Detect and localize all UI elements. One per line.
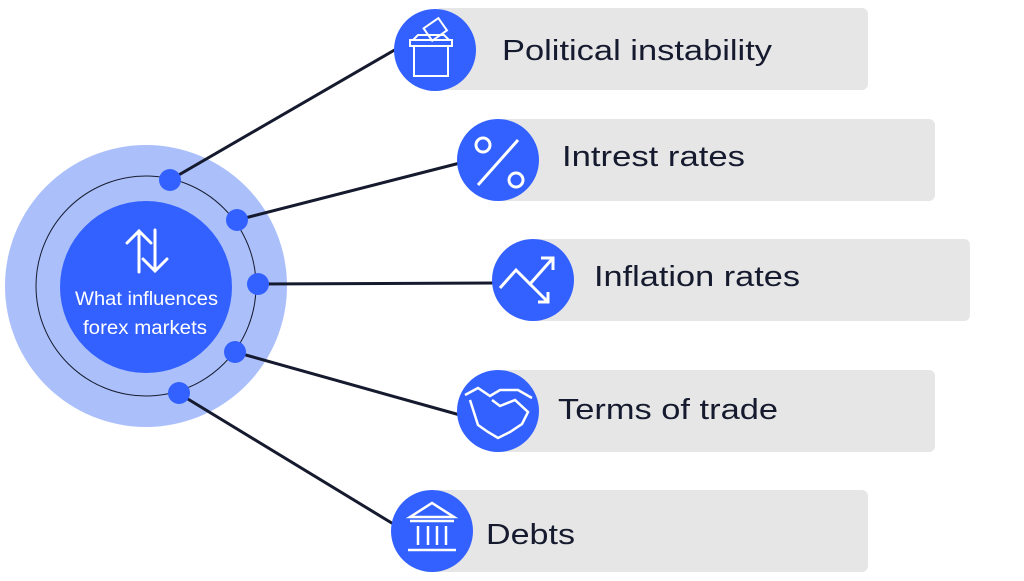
- item: political instability: Political instability: [502, 35, 773, 67]
- icon: up/down arrows: [127, 230, 167, 272]
- item: inflation rates: Inflation rates: [594, 261, 800, 293]
- item: interest rates: [457, 119, 935, 201]
- item: interest rates: Intrest rates: [562, 141, 745, 173]
- item: terms of trade: Terms of trade: [558, 394, 778, 426]
- central hub: forex markets: [83, 318, 207, 339]
- connector lines: [170, 48, 495, 525]
- item: political instability: [394, 8, 868, 91]
- hub label: What influences: [75, 289, 218, 310]
- item: inflation rates: [492, 239, 970, 321]
- item: debts: Debts: [486, 519, 575, 551]
- item: terms of trade: [457, 370, 935, 452]
- item: debts: [391, 490, 868, 572]
- connector dots: [159, 169, 269, 404]
- central hub: [5, 145, 287, 427]
